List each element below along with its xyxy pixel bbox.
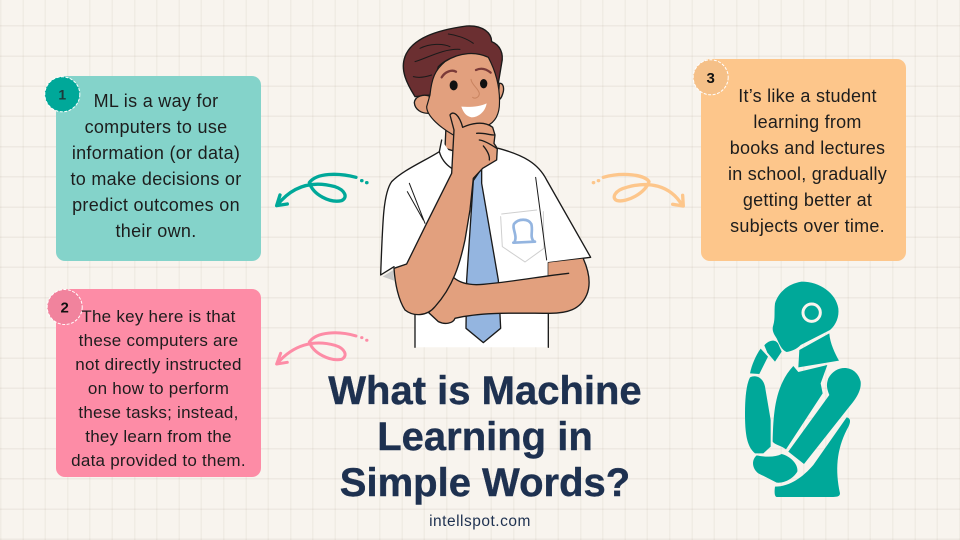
illustration: thinking robot — [745, 282, 861, 497]
arrow: orange swirl to card 3 — [593, 174, 683, 206]
badge 3: 3 — [707, 70, 715, 87]
card 1: teal definition: ML is a way for — [94, 91, 218, 111]
badge 2: 2 — [61, 300, 69, 316]
shirt — [381, 140, 591, 347]
title — [328, 369, 642, 505]
robot torso — [773, 365, 827, 449]
robot fingers — [764, 341, 782, 362]
arrow: teal swirl to card 1 — [277, 174, 367, 206]
badge 1: 1 — [58, 86, 66, 102]
robot hand — [753, 454, 797, 483]
card 1: teal definition: their own. — [115, 221, 197, 241]
card 1: teal definition: to make decisions or — [70, 169, 242, 189]
card 1: teal definition: computers to use — [85, 117, 227, 137]
illustration: thinking student — [381, 26, 591, 347]
robot forearm — [745, 376, 771, 453]
face — [427, 54, 500, 135]
card 1: teal definition: information (or data) — [72, 143, 240, 163]
card 1: teal definition — [56, 76, 261, 261]
arm and hand on chin — [394, 113, 497, 315]
badge 1 — [45, 77, 80, 112]
ears — [414, 95, 429, 113]
robot forearm upper — [750, 349, 768, 374]
arrow: pink swirl to card 2 — [277, 333, 367, 364]
badge 3 — [693, 60, 728, 95]
badge 2 — [47, 290, 82, 324]
tie — [466, 168, 501, 343]
card 2: pink explanation: The key here is that — [81, 307, 236, 326]
card 2: pink explanation: they learn from the — [85, 427, 232, 446]
card 3: orange analogy: It’s like a student — [738, 86, 877, 106]
eyes — [450, 79, 487, 90]
hair — [403, 26, 502, 97]
website credit: intellspot.com — [429, 513, 531, 530]
card 3: orange analogy: subjects over time. — [730, 216, 885, 236]
card 1: teal definition: predict outcomes on — [72, 195, 240, 215]
title: What is Machine — [328, 369, 642, 413]
card 2: pink explanation: not directly instructed — [75, 355, 242, 374]
title: Simple Words? — [340, 461, 630, 505]
card 2: pink explanation: data provided to them. — [71, 451, 246, 470]
eyebrows — [442, 69, 491, 77]
sleeve shadow — [383, 270, 394, 281]
card 3: orange analogy — [701, 59, 906, 261]
neck — [445, 127, 487, 160]
card 3: orange analogy: in school, gradually — [728, 164, 887, 184]
title: Learning in — [377, 415, 593, 459]
robot upper arm — [788, 368, 861, 464]
pocket — [501, 210, 544, 262]
folded forearm — [429, 259, 589, 323]
robot base — [775, 417, 850, 497]
nose — [471, 79, 479, 98]
forearm outline — [429, 259, 589, 323]
shirt folds — [407, 177, 547, 260]
hair strands — [413, 34, 473, 77]
robot eye ring — [803, 304, 820, 321]
card 2: pink explanation — [56, 289, 261, 477]
robot neck — [798, 333, 839, 367]
card 3: orange analogy: learning from — [753, 112, 862, 132]
card 3: orange analogy: books and lectures — [730, 138, 885, 158]
fingers — [477, 133, 497, 160]
shirt outline — [381, 140, 591, 347]
pocket logo — [513, 220, 535, 243]
card 2: pink explanation: these computers are — [79, 331, 238, 350]
card 3: orange analogy: getting better at — [743, 190, 872, 210]
smile — [461, 103, 487, 117]
card 2: pink explanation: on how to perform — [88, 379, 229, 398]
robot head — [773, 282, 838, 352]
card 2: pink explanation: these tasks; instead, — [78, 403, 239, 422]
